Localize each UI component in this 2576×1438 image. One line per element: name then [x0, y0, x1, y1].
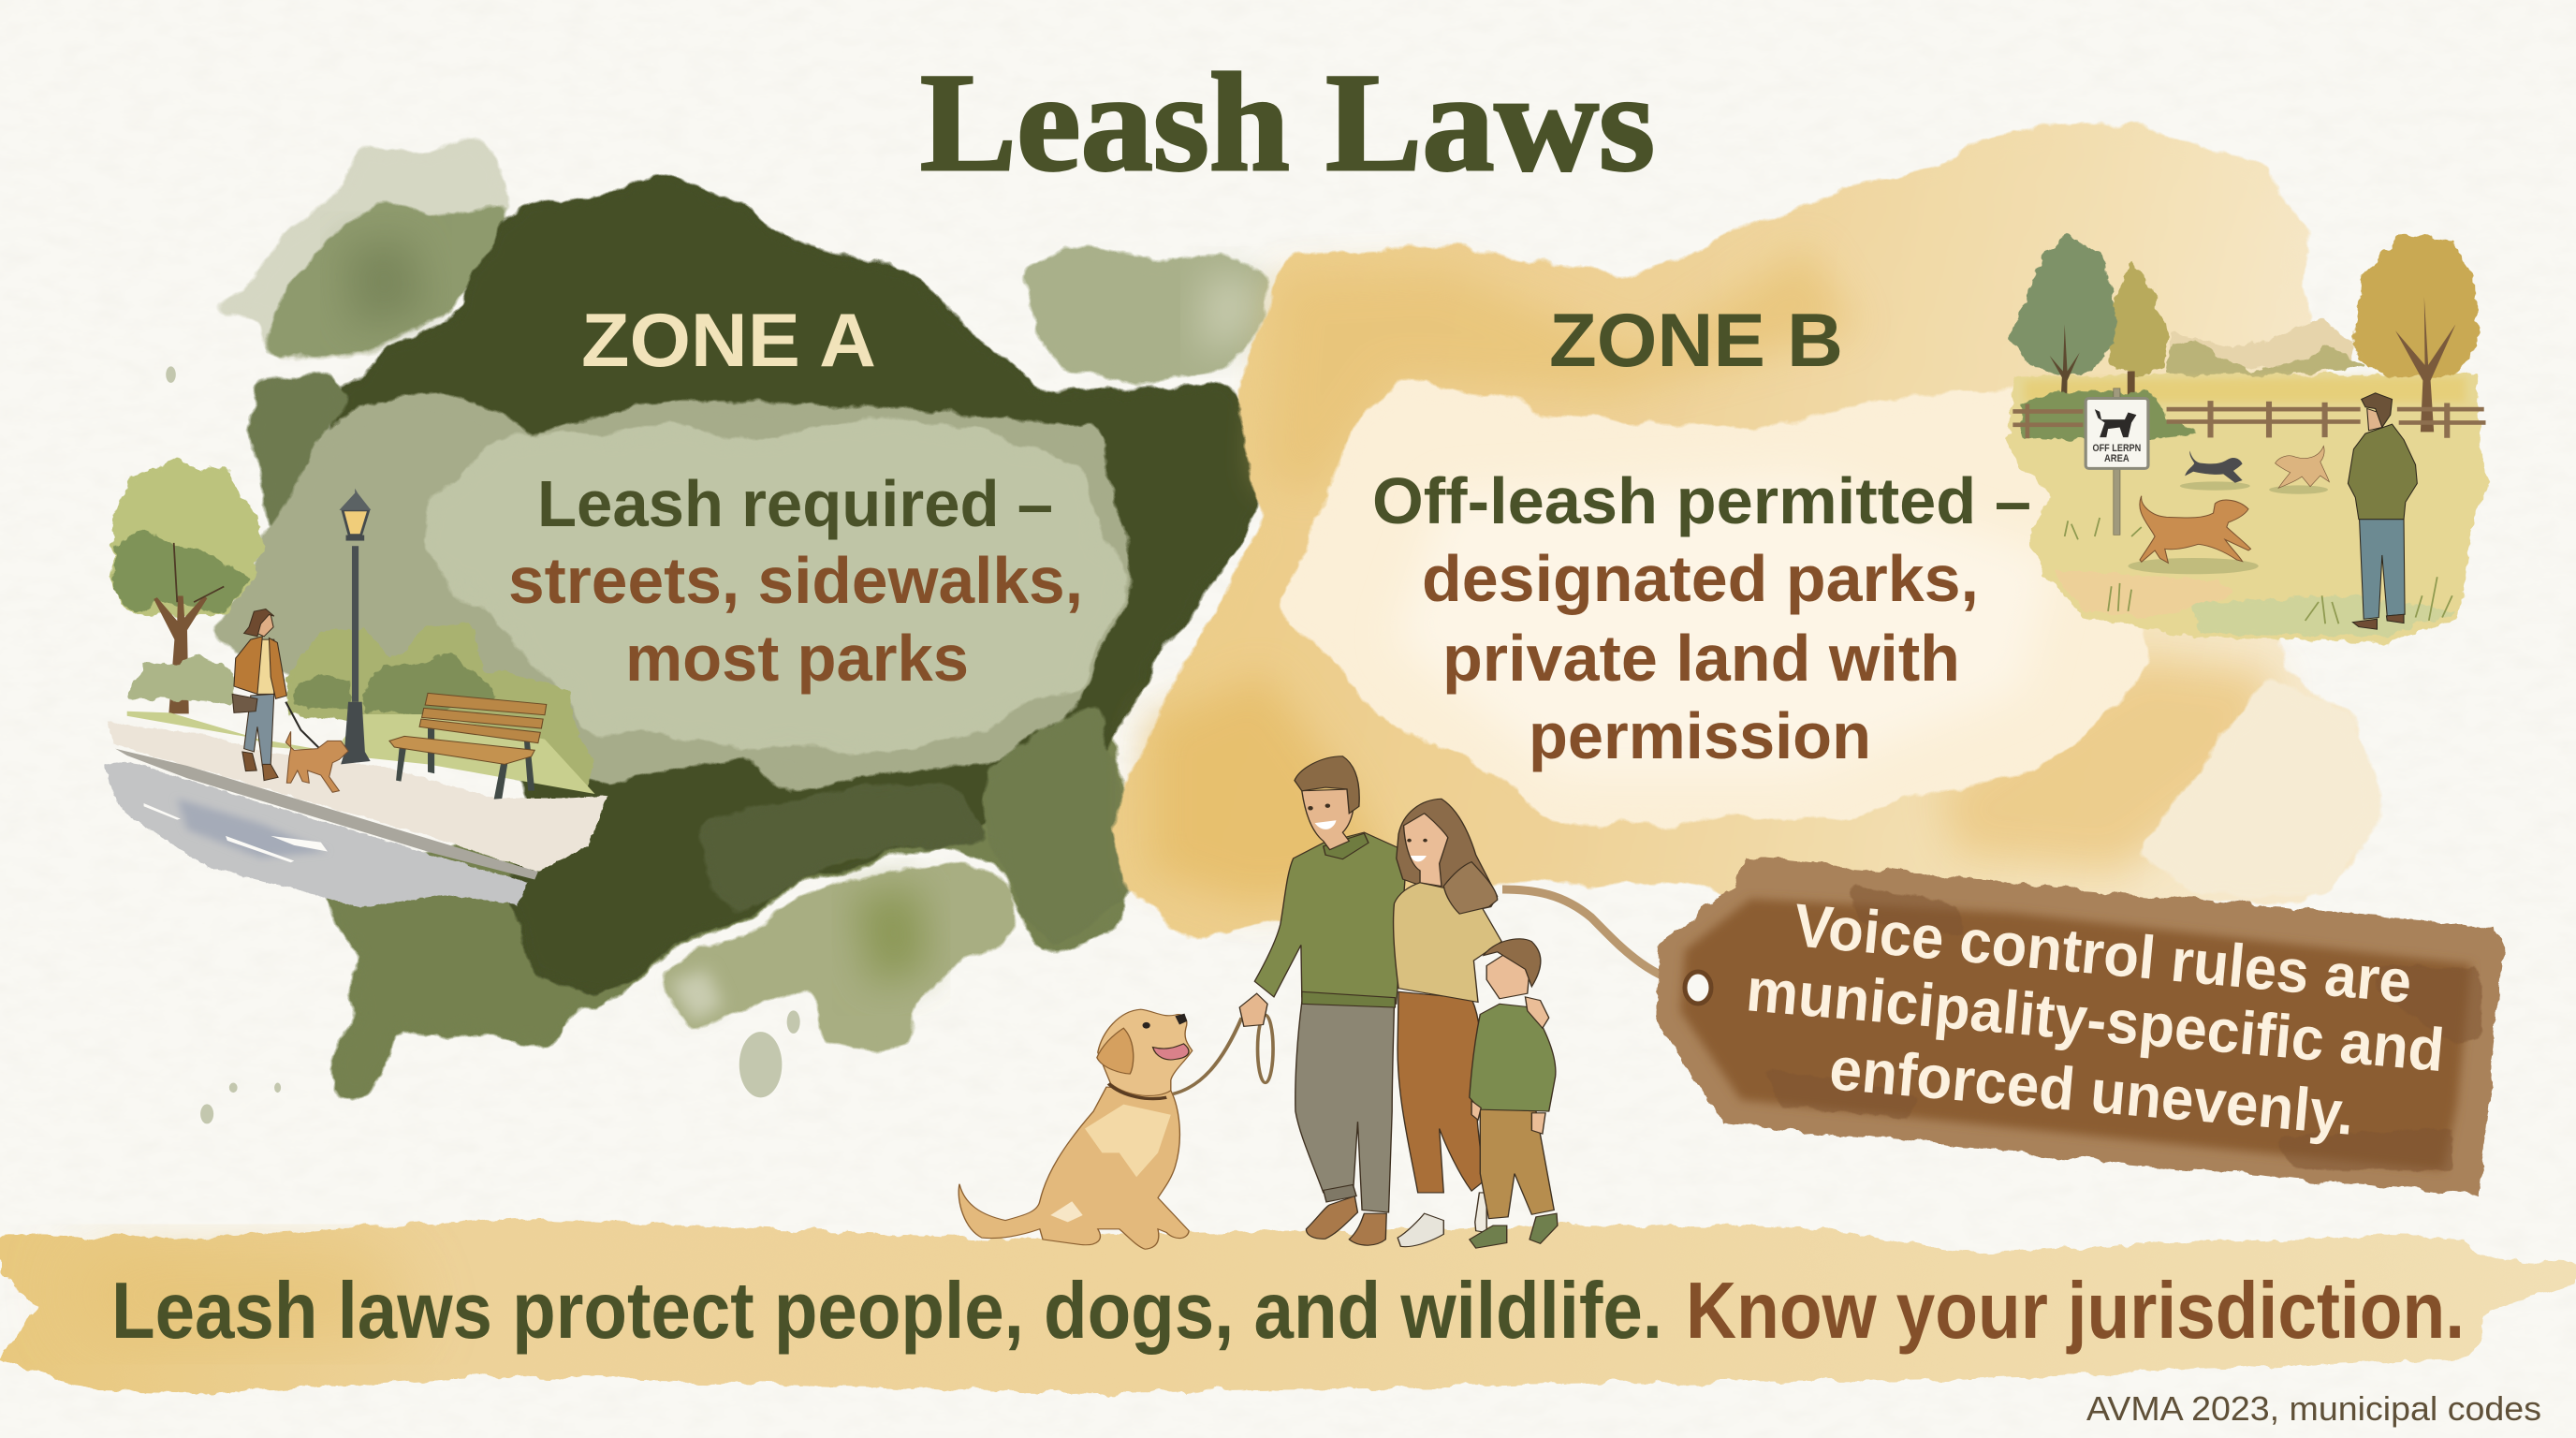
pale far hills	[2172, 318, 2352, 368]
wash: inner mid	[1277, 379, 2145, 825]
zone A text: Leash required –	[537, 467, 1053, 540]
ground patch: lower	[2191, 595, 2459, 637]
wash: medium lower patch	[700, 784, 989, 917]
tree: green	[2008, 234, 2116, 424]
zone B text: designated parks,	[1422, 542, 1979, 615]
scene: street with leashed dog	[104, 459, 608, 908]
wash: darker gold lower left	[1149, 674, 1397, 903]
illustration: family and dog	[959, 756, 1558, 1249]
woman walking	[232, 609, 328, 781]
callout text: municipality-specific and	[1744, 955, 2447, 1084]
wash: dark green main	[329, 176, 1270, 996]
tree	[112, 459, 264, 713]
road	[104, 761, 528, 908]
wash: top right blob	[1022, 242, 1270, 383]
zone A text: streets, sidewalks,	[508, 544, 1083, 617]
tag hole	[1685, 972, 1711, 1004]
zone B text	[1372, 464, 2031, 772]
sign: OFF LERPN	[2092, 442, 2141, 454]
tag dark stains	[1764, 885, 2481, 1170]
tree: gold	[2352, 234, 2479, 432]
leash	[1173, 1018, 1242, 1093]
road marks	[144, 803, 328, 862]
callout tag	[1655, 857, 2503, 1196]
zone A text	[508, 467, 1083, 695]
title: Leash Laws	[920, 45, 1655, 200]
wash: left olive strip	[250, 372, 348, 583]
curb	[115, 749, 538, 880]
bush	[2021, 389, 2202, 440]
tree: olive	[2110, 259, 2168, 399]
wash: lower right olive	[986, 703, 1130, 949]
ground patch: peach	[2051, 571, 2232, 618]
wash: gold lower right	[1939, 657, 2276, 871]
wash: lower right pale	[2136, 677, 2384, 895]
hedges	[128, 624, 595, 786]
zone A text: most parks	[625, 622, 969, 695]
wash: darker gold top-left	[1265, 246, 1856, 492]
callout text	[1744, 890, 2447, 1148]
wash: inner pale	[419, 416, 1134, 751]
shadows under dogs	[2129, 481, 2328, 574]
wash: lower olive base	[318, 723, 1134, 1099]
wash: mid pale	[211, 389, 1136, 792]
source credit: AVMA 2023, municipal codes	[2086, 1389, 2541, 1428]
lamp post	[339, 489, 371, 764]
wash: gold outer	[1114, 115, 2384, 946]
fence	[2012, 401, 2486, 438]
leash loop	[1258, 1015, 1273, 1083]
footer text: Know your jurisdiction.	[1686, 1267, 2465, 1356]
callout text: enforced unevenly.	[1827, 1034, 2357, 1148]
dog: tan	[2276, 446, 2329, 488]
grass tufts	[2065, 518, 2452, 624]
zone A heading: ZONE A	[581, 299, 876, 383]
small dog	[285, 731, 348, 792]
hills	[2165, 339, 2369, 377]
panel: zone B watercolor	[1114, 115, 2384, 946]
scene: off-leash park	[2008, 234, 2489, 642]
boy	[1470, 939, 1558, 1248]
sign: AREA	[2104, 453, 2130, 464]
grass	[127, 712, 595, 794]
wash: inner pale glow	[1397, 477, 2054, 772]
zone B heading: ZONE B	[1549, 299, 1843, 383]
footer text: Leash laws protect people, dogs, and wildlife.	[111, 1267, 1662, 1356]
bench	[389, 693, 547, 800]
dog: black	[2185, 450, 2243, 483]
dog: golden running	[2140, 496, 2251, 563]
wash: bottom blob	[661, 864, 1018, 1051]
splashes	[166, 366, 800, 1123]
zone B text: permission	[1529, 699, 1871, 772]
ground	[2008, 374, 2489, 642]
man	[1239, 756, 1405, 1245]
footer banner	[0, 1219, 2576, 1393]
sidewalk	[107, 722, 608, 872]
ground: yellow far field	[2025, 377, 2466, 403]
man from back	[2348, 393, 2417, 629]
zone B text: Off-leash permitted –	[1372, 464, 2031, 537]
woman	[1394, 799, 1501, 1247]
wash: top-left light blob	[211, 131, 509, 361]
golden retriever	[959, 1009, 1193, 1249]
sign	[2086, 389, 2148, 535]
zone B text: private land with	[1442, 622, 1960, 695]
callout text: Voice control rules are	[1792, 890, 2415, 1016]
road shade	[177, 799, 328, 858]
tag string	[1502, 889, 1699, 988]
panel: zone A watercolor	[166, 131, 1270, 1123]
